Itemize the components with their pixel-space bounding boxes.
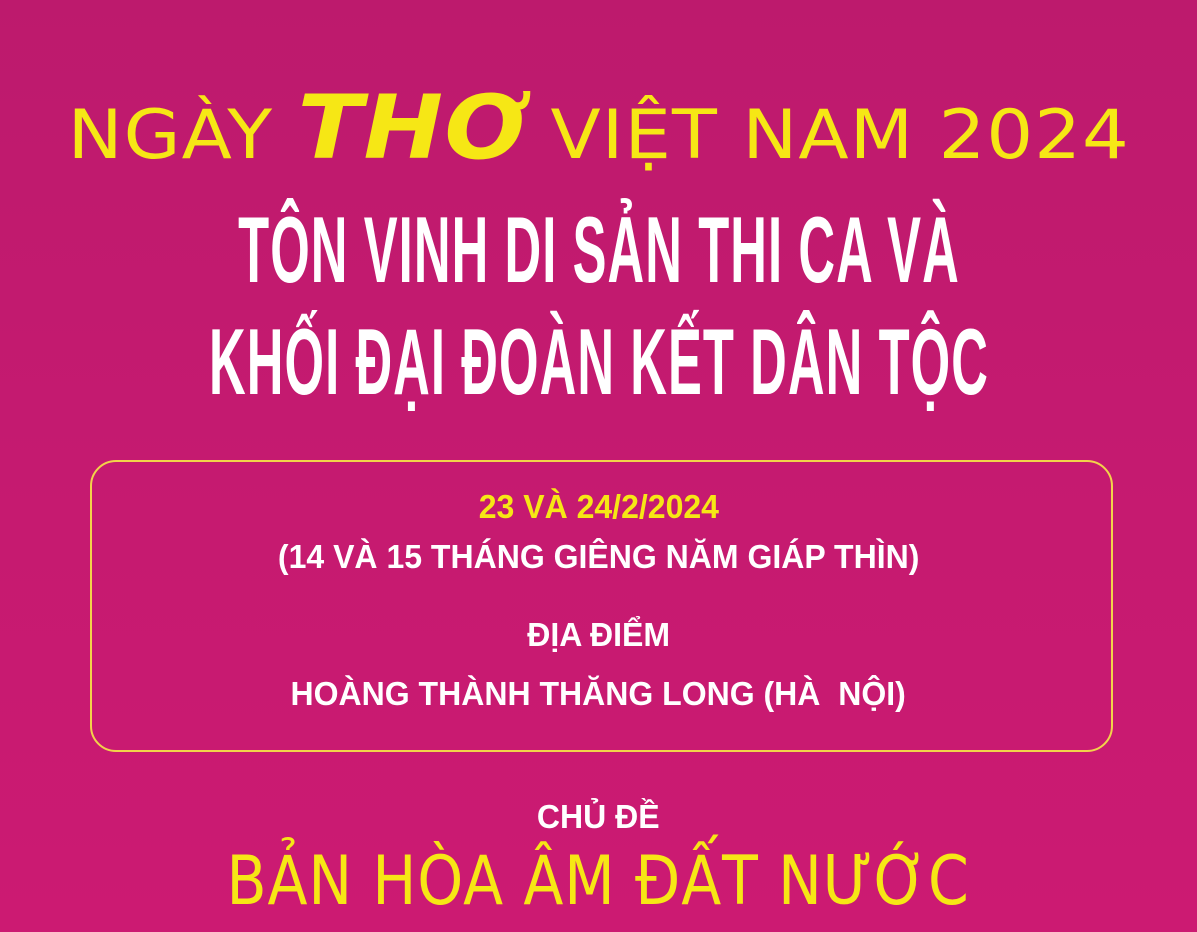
heading line 2: KHỐI ĐẠI ĐOÀN KẾT DÂN TỘC [209,309,988,414]
lunar date: (14 VÀ 15 THÁNG GIÊNG NĂM GIÁP THÌN) [278,538,919,575]
heading line 1: TÔN VINH DI SẢN THI CA VÀ [238,197,959,302]
title: NGÀY THƠ VIỆT NAM 2024 [67,76,1130,179]
info box [90,460,1113,752]
theme: BẢN HÒA ÂM ĐẤT NƯỚC [227,842,970,921]
location: HOÀNG THÀNH THĂNG LONG (HÀ NỘI) [291,675,906,712]
location label: ĐỊA ĐIỂM [527,616,670,653]
date: 23 VÀ 24/2/2024 [478,488,719,525]
theme label: CHỦ ĐỀ [537,798,660,835]
